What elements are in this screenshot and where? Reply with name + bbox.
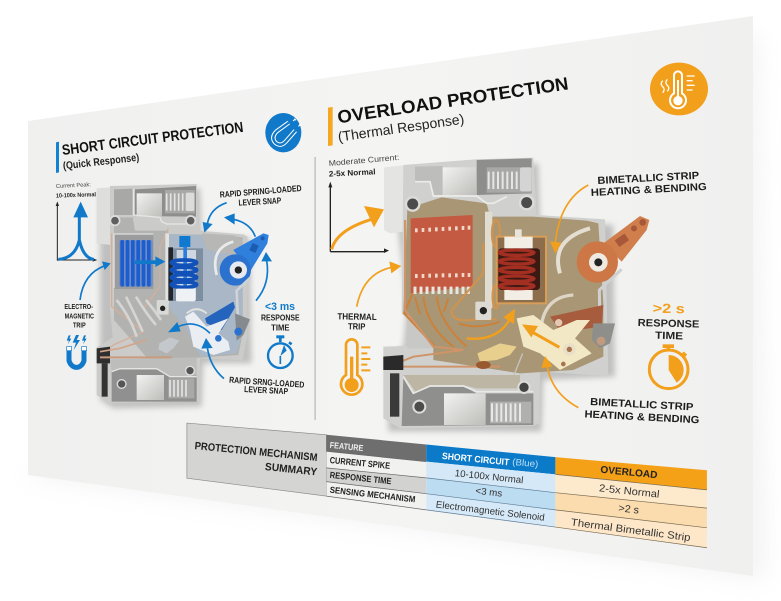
table column: feature: CURRENT SPIKE (329, 455, 391, 471)
breaker: overload cutaway (383, 158, 649, 432)
arrow: to frame (203, 203, 227, 233)
table column: short circuit: (Blue) (512, 457, 539, 469)
label: thermal trip (337, 311, 377, 332)
arrow: lever snap top (224, 213, 255, 237)
chart: current peak: Current Peak: (56, 182, 91, 190)
table column: overload: OVERLOAD (600, 465, 658, 481)
arrow: to solenoid coil (80, 261, 111, 300)
chart: current peak (56, 182, 97, 262)
arrow: plunger motion (135, 256, 165, 267)
table column: feature: SENSING MECHANISM (329, 485, 416, 504)
table column: overload (555, 457, 707, 548)
table column: overload: >2 s (618, 503, 640, 517)
arrow: latch push (522, 324, 559, 347)
icon: thermometer badge (650, 63, 708, 115)
icon: magnet badge (265, 113, 301, 152)
table title cell (187, 423, 326, 496)
icon: stopwatch blue (268, 335, 293, 368)
label: response time <3 ms: TIME (271, 323, 290, 333)
label: response time <3 ms: RESPONSE (261, 312, 300, 322)
label: rapid spring-loaded lever snap (bottom): LEVER SNAP (244, 384, 289, 396)
label: bimetallic strip top: HEATING & BENDING (591, 182, 707, 199)
label: electro-magnetic trip (64, 304, 94, 330)
table column: short circuit: 10-100x Normal (454, 468, 524, 486)
label: response time >2 s: TIME (655, 331, 683, 342)
label: bimetallic strip bottom: HEATING & BENDING (584, 409, 700, 426)
icon: magnet with sparks (67, 335, 87, 367)
table column: overload: 2-5x Normal (598, 483, 660, 501)
heading accent bar (328, 107, 333, 146)
icon: thermometer (341, 339, 370, 395)
arrow: thermal trip to element (357, 261, 401, 307)
heading accent bar (56, 142, 59, 173)
subheading: quick response: (Quick Response) (62, 152, 140, 172)
heading: short circuit: SHORT CIRCUIT PROTECTION (61, 120, 244, 159)
arrow: bottom bimetal (541, 356, 578, 408)
arrow: to bimetal strip top (550, 185, 588, 253)
label: rapid spring-loaded lever snap (bottom) (229, 375, 305, 396)
label: response time >2 s: >2 s (653, 301, 685, 316)
table title cell: PROTECTION MECHANISM (194, 440, 318, 464)
chart: moderate current: Moderate Current: (328, 153, 400, 168)
label: response time <3 ms (261, 301, 300, 333)
label: rapid spring-loaded lever snap (top): RAPID SPRING-LOADED (219, 183, 302, 200)
label: thermal trip: TRIP (348, 321, 365, 332)
label: thermal trip: THERMAL (337, 311, 377, 322)
label: bimetallic strip bottom (584, 397, 700, 426)
arrow: current flow (467, 309, 515, 339)
icon: stopwatch orange (649, 344, 688, 389)
label: bimetallic strip top: BIMETALLIC STRIP (597, 171, 699, 187)
table column: short circuit (426, 444, 555, 527)
arrow: lever up (256, 252, 272, 301)
chart: moderate current: 2-5x Normal (329, 167, 376, 179)
table column: feature (326, 435, 426, 510)
label: response time >2 s: RESPONSE (638, 318, 700, 331)
breaker: short circuit cutaway (97, 184, 269, 408)
label: electro-magnetic trip: ELECTRO- (64, 304, 94, 311)
chart: moderate current (328, 153, 400, 253)
table title cell: SUMMARY (264, 461, 318, 478)
chart: current peak: 10-100x Normal (56, 192, 96, 200)
subheading: thermal response: (Thermal Response) (337, 111, 465, 145)
heading: overload: OVERLOAD PROTECTION (336, 73, 570, 127)
arrow: latch bottom (201, 338, 224, 379)
table column: short circuit: Electromagnetic Solenoid (435, 500, 545, 524)
panel: overload protection (328, 63, 708, 432)
label: rapid spring-loaded lever snap (bottom): RAPID SRNG-LOADED (229, 375, 305, 390)
label: electro-magnetic trip: MAGNETIC (65, 314, 94, 321)
table column: short circuit: SHORT CIRCUIT (442, 451, 510, 467)
table column: feature: FEATURE (329, 440, 364, 453)
label: rapid spring-loaded lever snap (top) (219, 183, 302, 208)
label: response time >2 s (638, 301, 700, 342)
label: electro-magnetic trip: TRIP (73, 323, 86, 330)
label: bimetallic strip bottom: BIMETALLIC STRIP (590, 397, 694, 413)
panel divider (314, 157, 316, 420)
arrow: latch release (168, 322, 210, 333)
table column: overload: Thermal Bimetallic Strip (570, 517, 691, 544)
label: rapid spring-loaded lever snap (top): LEVER SNAP (238, 195, 282, 208)
panel: short circuit protection (56, 113, 305, 408)
table column: feature: RESPONSE TIME (329, 470, 392, 486)
label: bimetallic strip top (591, 171, 707, 199)
label: response time <3 ms: <3 ms (265, 301, 295, 313)
table column: short circuit: <3 ms (475, 486, 503, 500)
summary table (187, 423, 707, 548)
